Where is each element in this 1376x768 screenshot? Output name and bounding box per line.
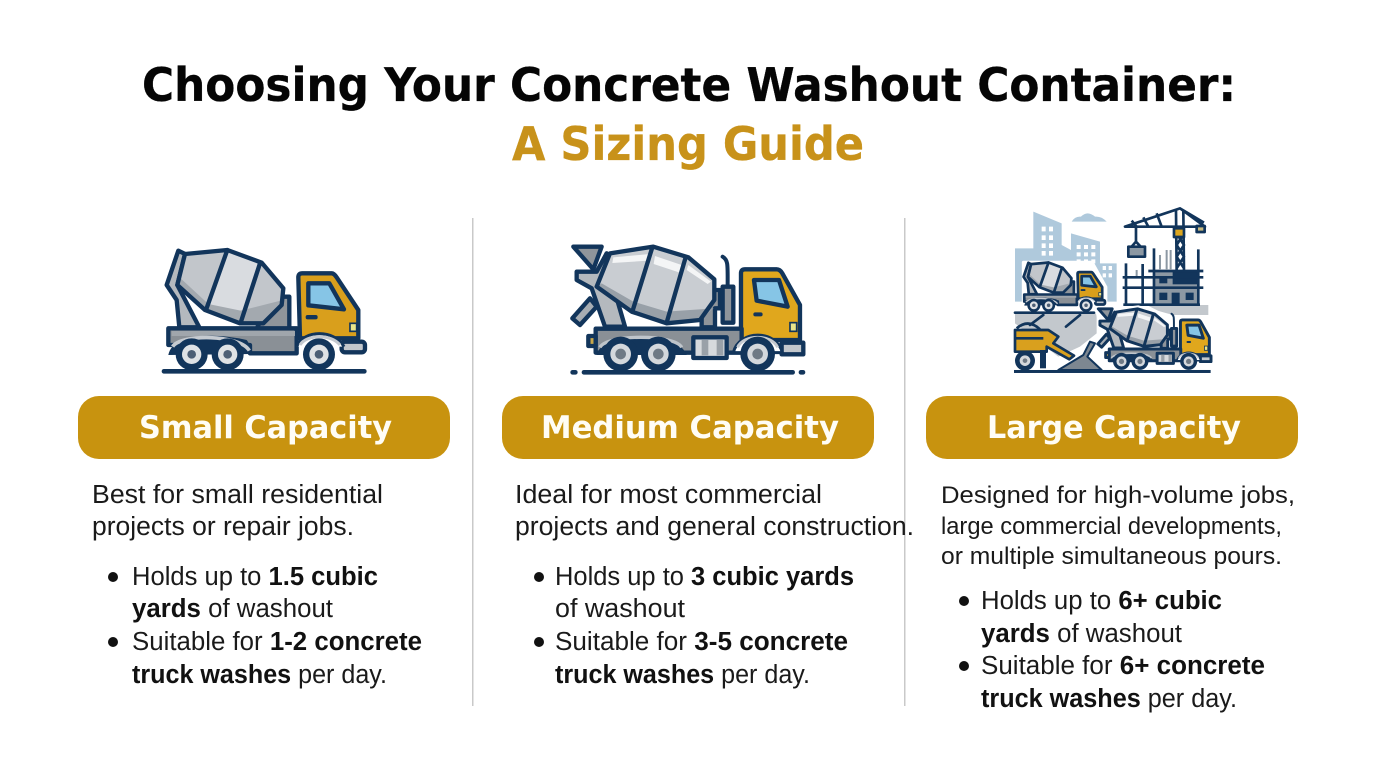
column divider right — [904, 218, 906, 706]
title line 1: Choosing Your Concrete Washout Container: — [142, 58, 1236, 112]
icon: small mixer truck — [162, 250, 367, 374]
bullet list: small capacity: Suitable for 1-2 concrete — [132, 628, 422, 656]
title — [142, 58, 1236, 171]
building under construction — [1123, 248, 1203, 305]
description: medium capacity: projects and general construction. — [515, 513, 914, 541]
ground — [1015, 305, 1208, 357]
bullet list: medium capacity — [534, 563, 854, 689]
bullet list: large capacity: Holds up to 6+ cubic — [981, 587, 1222, 615]
icon: construction site with trucks — [1014, 208, 1212, 373]
description: large capacity — [941, 482, 1295, 570]
heading pill: small capacity — [78, 396, 450, 459]
heading pill: large capacity: Large Capacity — [987, 410, 1241, 446]
bullet list: small capacity: yards of washout — [132, 595, 333, 623]
heading pill: medium capacity: Medium Capacity — [541, 410, 839, 446]
concrete pile — [1058, 342, 1102, 370]
ground line — [1014, 370, 1211, 373]
bullet list: medium capacity: Holds up to 3 cubic yards — [555, 563, 854, 591]
description: large capacity: or multiple simultaneous pours. — [941, 543, 1282, 570]
bullet list: large capacity: Suitable for 6+ concrete — [981, 652, 1265, 680]
heading pill: large capacity — [926, 396, 1298, 459]
panel: small capacity — [78, 250, 450, 689]
tower crane — [1125, 208, 1205, 270]
icon: medium mixer truck — [570, 247, 805, 375]
bullet list: large capacity — [959, 587, 1265, 713]
small truck — [1024, 263, 1106, 312]
bullet list: medium capacity: truck washes per day. — [555, 661, 810, 689]
heading pill: medium capacity — [502, 396, 874, 459]
road lines — [1015, 313, 1094, 327]
bullet list: medium capacity: Suitable for 3-5 concrete — [555, 628, 848, 656]
bullet list: large capacity: yards of washout — [981, 620, 1182, 648]
bullet list: large capacity: truck washes per day. — [981, 685, 1237, 713]
description: small capacity: Best for small residential — [92, 481, 383, 509]
title line 2: A Sizing Guide — [512, 117, 864, 171]
dump machine — [1015, 324, 1074, 371]
bullet list: small capacity: truck washes per day. — [132, 661, 387, 689]
description: small capacity — [92, 481, 383, 541]
description: medium capacity — [515, 481, 914, 541]
description: medium capacity: Ideal for most commercial — [515, 481, 822, 509]
bullet list: medium capacity: of washout — [555, 595, 685, 623]
heading pill: small capacity: Small Capacity — [139, 410, 392, 446]
panel: medium capacity — [502, 247, 914, 689]
city skyline — [1015, 212, 1117, 302]
large truck — [1097, 307, 1212, 371]
bullet list: small capacity: Holds up to 1.5 cubic — [132, 563, 378, 591]
column divider left — [472, 218, 474, 706]
description: large capacity: Designed for high-volume jobs, — [941, 482, 1295, 509]
bullet list: small capacity — [108, 563, 422, 689]
description: small capacity: projects or repair jobs. — [92, 513, 354, 541]
panel: large capacity — [926, 208, 1298, 713]
description: large capacity: large commercial developments, — [941, 513, 1282, 540]
